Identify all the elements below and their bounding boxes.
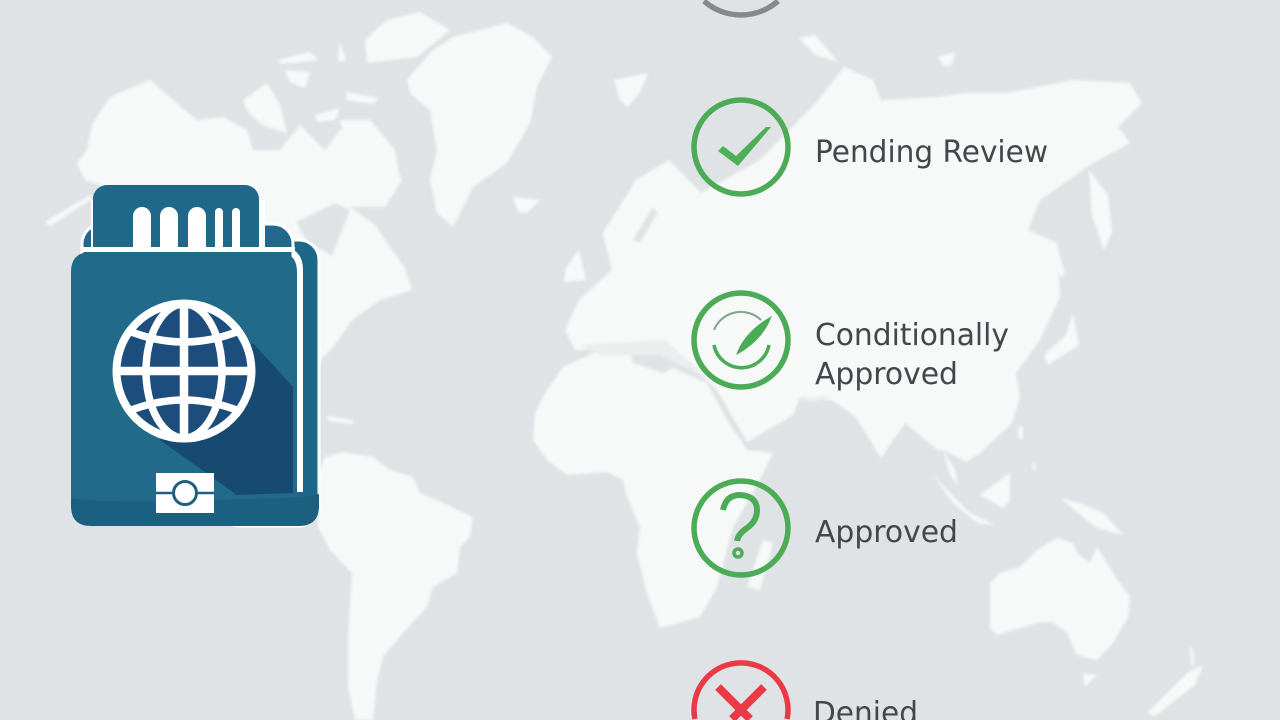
- seas cut into the land: [296, 203, 658, 256]
- status: denied: [694, 663, 918, 720]
- front cover: [71, 252, 297, 503]
- top card with tabs: [91, 185, 265, 247]
- middle page: [82, 224, 293, 324]
- icon: top partly visible status: [704, 1, 778, 15]
- icon: globe: [116, 304, 252, 438]
- icon: chip: [156, 473, 214, 513]
- cover bottom band: [71, 494, 319, 526]
- white page edge: [85, 247, 303, 492]
- status: approved: [694, 481, 958, 575]
- label: pending review: Pending Review: [815, 135, 1048, 170]
- globe shadow: [160, 343, 293, 495]
- back page: [220, 240, 319, 526]
- status: conditionally approved: [694, 293, 1019, 392]
- label: conditionally approved: Conditionally: [815, 318, 1009, 353]
- icon: question mark: [694, 481, 788, 575]
- icon: leaf check: [694, 293, 788, 387]
- icon: red cross: [694, 663, 788, 719]
- icon: passport: [71, 185, 319, 526]
- label: approved: Approved: [815, 515, 958, 550]
- status: pending review: [694, 100, 1048, 194]
- label: conditionally approved: Approved: [815, 357, 958, 392]
- icon: check mark: [694, 100, 788, 194]
